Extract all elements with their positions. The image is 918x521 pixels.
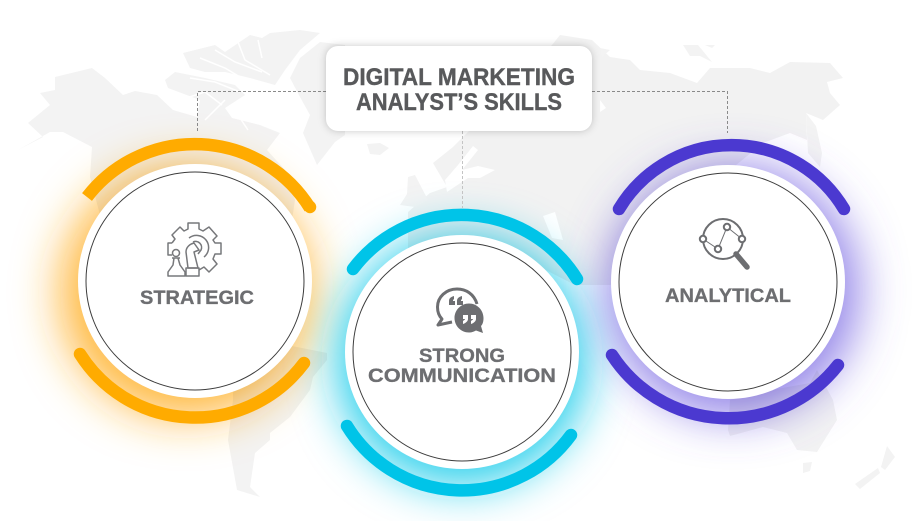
connector: dashed lines xyxy=(198,92,728,208)
panel: strategic xyxy=(78,144,316,418)
Greenland xyxy=(290,42,345,165)
title: DIGITAL MARKETING xyxy=(343,64,575,91)
New Zealand xyxy=(855,446,895,489)
orange bottom arc xyxy=(80,354,304,418)
orange top arc xyxy=(87,144,310,208)
label: strong communication: COMMUNICATION xyxy=(368,366,556,387)
panel: analytical xyxy=(611,145,845,418)
United Kingdom xyxy=(400,175,428,207)
inner circle xyxy=(86,172,304,390)
glow: cyan xyxy=(336,234,588,486)
Svalbard and northern islands xyxy=(600,45,715,62)
Iceland xyxy=(367,143,389,155)
glow: orange xyxy=(60,166,312,418)
label: analytical: ANALYTICAL xyxy=(665,286,791,307)
cyan top arc xyxy=(353,215,577,279)
cyan bottom arc xyxy=(347,426,571,490)
inner circle xyxy=(619,173,837,391)
inland water xyxy=(445,146,495,192)
inner circle xyxy=(353,243,571,461)
Japan xyxy=(806,113,822,167)
Tasmania xyxy=(803,462,812,473)
purple top arc xyxy=(619,145,844,209)
purple bottom arc xyxy=(612,355,838,418)
panel: strong communication xyxy=(345,215,579,490)
white ring xyxy=(611,165,845,399)
Eurasia xyxy=(408,35,843,285)
South America xyxy=(228,340,327,497)
white ring xyxy=(78,164,312,398)
arctic channels xyxy=(180,40,270,130)
title box xyxy=(326,46,592,131)
icon: gear and chess pieces xyxy=(168,223,221,276)
title: ANALYST’S SKILLS xyxy=(356,89,562,116)
icon: magnifier with nodes xyxy=(700,219,747,267)
white ring xyxy=(345,235,579,469)
label: strong communication: STRONG xyxy=(419,346,505,367)
Australia xyxy=(728,370,837,452)
label: strategic: STRATEGIC xyxy=(140,288,254,309)
Canadian arctic islands xyxy=(183,30,320,85)
glow: purple xyxy=(607,165,859,417)
North America xyxy=(18,68,295,330)
icon: speech bubbles xyxy=(438,289,484,333)
